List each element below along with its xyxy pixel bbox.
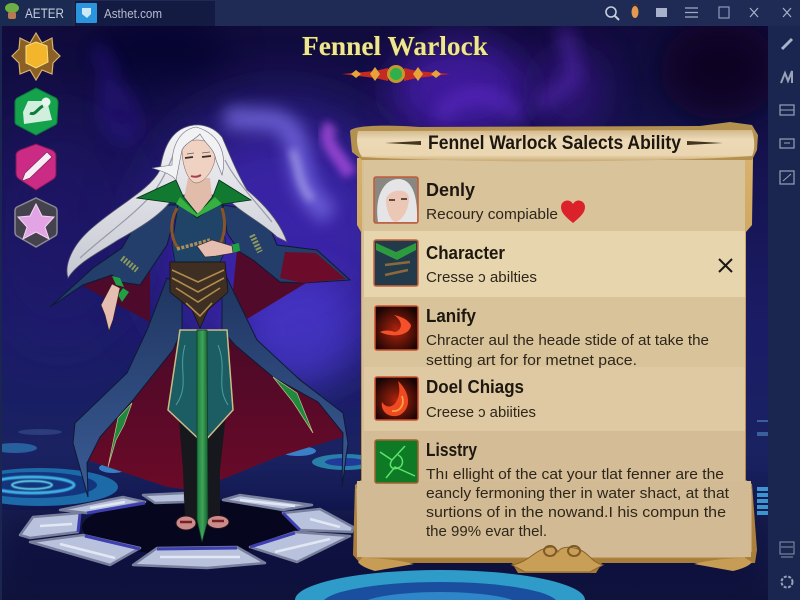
- row: Lanify: Lanify: [426, 305, 477, 326]
- title scroll: [350, 122, 758, 161]
- row: Lisstry: Thı ellight of the cat your tlat fenner are the: [426, 466, 724, 483]
- tab: Asthet.com: [75, 1, 215, 26]
- left sleeve: [50, 205, 178, 307]
- row: Denly: Denly: [426, 179, 476, 200]
- row: Doel Chiags: Doel Chiags: [426, 376, 524, 397]
- bodice: [172, 205, 226, 262]
- character: white-haired warlock: [50, 125, 350, 542]
- neck and chest: [184, 178, 212, 214]
- right sleeve: [223, 205, 350, 283]
- legs: [177, 395, 228, 520]
- top bar: [0, 0, 800, 26]
- sandals: [176, 516, 229, 530]
- right cape drape: [222, 278, 348, 487]
- left icon: pink pencil badge: [16, 144, 56, 190]
- green sword: [197, 330, 208, 542]
- tab: Aeter: AETER: [25, 5, 64, 21]
- green cuffs: [112, 243, 240, 302]
- row backgrounds: [357, 160, 751, 557]
- green cape tips: [108, 377, 313, 467]
- front hair: [152, 127, 224, 180]
- row: Character: Cresse ɔ abilties: [426, 269, 537, 286]
- ornate belt: [170, 262, 228, 328]
- row: Character: Character: [426, 242, 505, 263]
- leather straps: [172, 208, 225, 248]
- row: Lanify: setting art for for metnet pace.: [426, 352, 637, 369]
- row: Lanify: [375, 305, 709, 369]
- top bar icons: [606, 4, 791, 20]
- icon: portrait: [374, 177, 418, 223]
- face: [182, 140, 215, 183]
- row: Doel Chiags: Creese ɔ abiities: [426, 404, 536, 421]
- row: Doel Chiags: [375, 376, 536, 421]
- crimson cape lining: [83, 250, 343, 490]
- tab: Aeter: [0, 0, 72, 26]
- icon: close: [719, 259, 732, 272]
- sleeve embroidery: [122, 235, 260, 270]
- green collar: [137, 180, 251, 218]
- row: Lisstry: eancly fermoning ther in water shact, at that: [426, 485, 730, 502]
- tab: Asthet.com: Asthet.com: [104, 7, 162, 21]
- panel: ability list: [350, 122, 758, 573]
- title ornament: [342, 65, 450, 83]
- floor rune circles: [0, 420, 768, 600]
- flowing white hair: [67, 125, 287, 278]
- row: Denly: Recoury compiable: [426, 206, 558, 223]
- row: Lanify: Chracter aul the heade stide of at take the: [426, 332, 709, 349]
- teal front panel: [168, 330, 233, 443]
- left cape drape: [73, 278, 182, 497]
- row: Character: [374, 240, 732, 286]
- icon: flame: [375, 377, 418, 420]
- parchment frame: [353, 158, 757, 573]
- row: Lisstry: Lisstry: [426, 439, 478, 460]
- title scroll: Fennel Warlock Salects Ability: [428, 133, 681, 154]
- icon: green rune: [375, 440, 418, 483]
- left hand: [101, 284, 120, 331]
- icon: costume: [374, 240, 418, 286]
- left icon: green hexagon: [15, 88, 58, 135]
- right sidebar: [768, 26, 800, 600]
- title: Fennel Warlock: [302, 31, 488, 61]
- circular stone platform: [20, 493, 353, 568]
- row: Lisstry: [375, 439, 730, 540]
- icon: heart: [561, 200, 585, 223]
- bottom scroll ornament: [358, 546, 752, 572]
- row: Lisstry: surtions of in the nowand.I his compun the: [426, 504, 726, 521]
- left icon: violet star badge: [15, 198, 57, 247]
- left icon: gold star badge: [12, 33, 60, 80]
- hand on hip: [197, 240, 233, 257]
- row: Lisstry: the 99% evar thel.: [426, 523, 547, 540]
- row: Denly: [374, 177, 585, 223]
- icon: red swirl: [375, 306, 418, 350]
